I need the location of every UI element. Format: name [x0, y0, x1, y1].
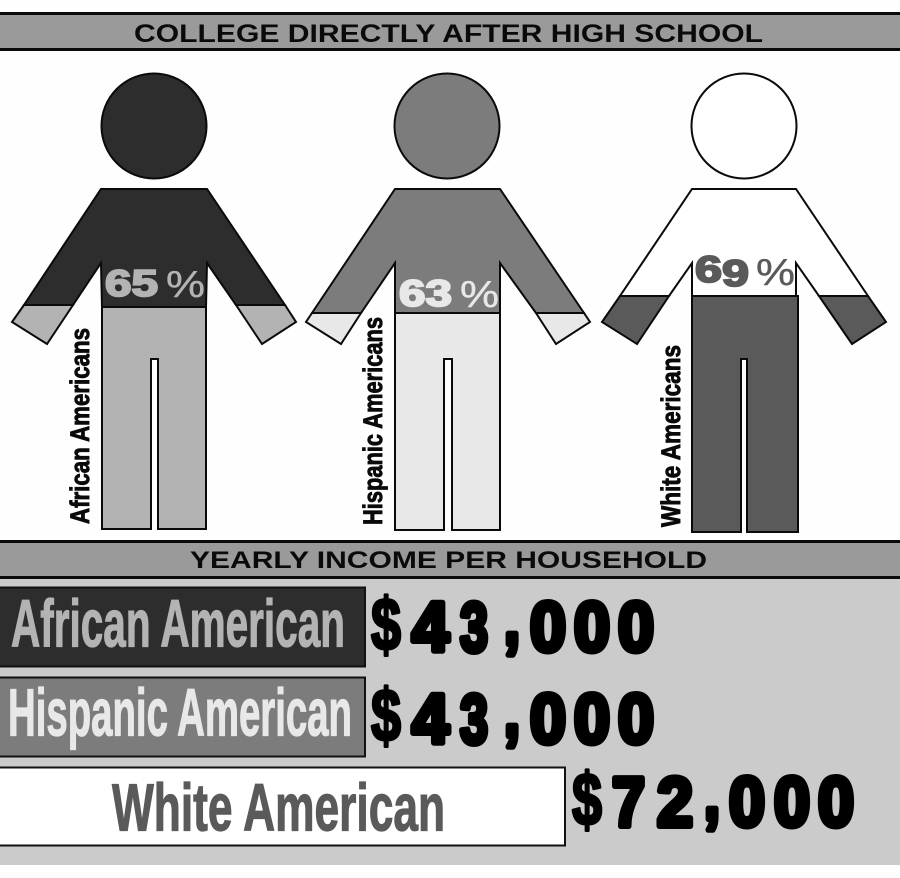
amount: 0: [530, 680, 566, 758]
percentage: %: [460, 274, 499, 315]
percentage: %: [756, 252, 795, 293]
sleeve cuffs: [306, 313, 590, 344]
row: African American income: [0, 581, 654, 666]
sleeve cuffs: [12, 305, 296, 344]
amount: 4: [412, 588, 449, 666]
heading: yearly income per household: [0, 542, 900, 578]
percentage: 63: [399, 273, 452, 314]
amount: 0: [774, 763, 810, 841]
heading: college directly after high school: [0, 14, 900, 50]
label box: Hispanic American: [8, 676, 352, 750]
figure: African Americans 65%: [12, 74, 296, 529]
percentage: 6: [695, 249, 722, 290]
amount: 4: [412, 680, 449, 758]
amount: [572, 756, 854, 841]
heading: college directly after high school: COLLEGE DIRECTLY AFTER HIGH SCHOOL: [134, 20, 763, 48]
amount: 0: [530, 588, 566, 666]
shirt: [312, 189, 584, 313]
amount: 0: [574, 588, 610, 666]
sleeve cuffs: [602, 296, 886, 344]
percentage: %: [166, 264, 205, 305]
shirt: [620, 189, 868, 296]
head: [394, 74, 500, 178]
percentage: [105, 263, 205, 305]
amount: ,: [504, 581, 520, 659]
amount: 0: [729, 763, 765, 841]
amount: 3: [460, 680, 488, 758]
head: [692, 74, 796, 178]
percentage: 65: [105, 263, 158, 304]
label box: [0, 586, 365, 666]
amount: 0: [818, 763, 854, 841]
amount: $: [371, 583, 401, 666]
figure: White Americans 69%: [602, 74, 886, 532]
row: Hispanic American income: [0, 673, 654, 758]
percentage: [695, 249, 795, 294]
label box: African American: [11, 586, 345, 662]
amount: 0: [618, 680, 654, 758]
vertical label: Hispanic Americans: [358, 317, 388, 525]
panel: yearly income background: [0, 578, 900, 865]
amount: 3: [460, 588, 488, 666]
percentage: [399, 273, 499, 315]
trousers: [395, 313, 500, 530]
amount: 7: [612, 763, 645, 841]
amount: $: [371, 674, 401, 757]
amount: 2: [657, 763, 693, 841]
trousers: [692, 296, 798, 532]
amount: [371, 673, 654, 758]
amount: ,: [504, 673, 520, 751]
amount: [371, 581, 654, 666]
percentage: 9: [722, 253, 749, 294]
label box: [0, 676, 365, 756]
heading: yearly income per household: YEARLY INCOME PER HOUSEHOLD: [190, 547, 707, 574]
row: White American income: [0, 756, 854, 846]
amount: $: [572, 758, 602, 841]
amount: 0: [618, 588, 654, 666]
figure: Hispanic Americans 63%: [306, 74, 590, 530]
vertical label: African Americans: [65, 328, 95, 524]
amount: ,: [704, 756, 720, 834]
label box: White American: [112, 770, 445, 846]
shirt: [24, 189, 285, 307]
vertical label: White Americans: [656, 345, 686, 527]
head: [102, 74, 206, 178]
amount: 0: [574, 680, 610, 758]
trousers: [102, 307, 206, 529]
